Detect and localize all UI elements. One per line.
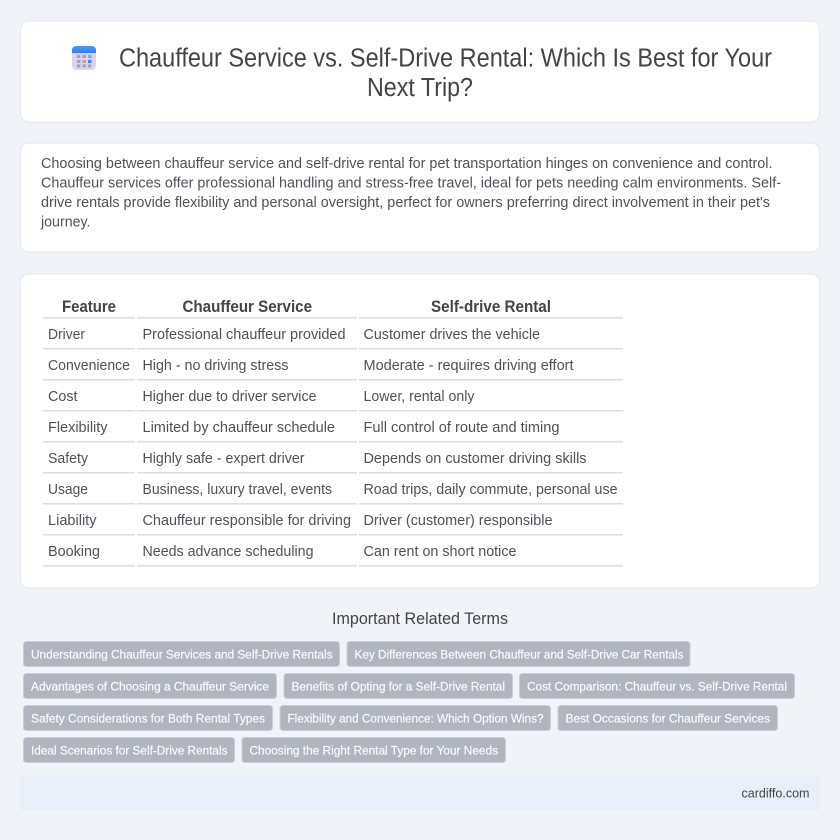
- text block: introduction paragraph: Choosing between chauffeur service and self-drive rental for pet transportation hinges on convenience and control.: [41, 156, 772, 172]
- row: safety: Depends on customer driving skills: [364, 451, 586, 467]
- row: usage: Usage: [48, 482, 88, 498]
- tag: Benefits of Opting for a Self-Drive Rental: [292, 679, 505, 693]
- row: convenience: High - no driving stress: [142, 358, 288, 374]
- row: usage: [48, 482, 618, 498]
- row: flexibility: [48, 420, 560, 436]
- tag: [24, 642, 340, 666]
- tag: [24, 738, 234, 762]
- title: [119, 44, 772, 102]
- tag: Ideal Scenarios for Self-Drive Rentals: [31, 743, 228, 757]
- row: liability: [48, 513, 552, 529]
- tag: Flexibility and Convenience: Which Option Wins?: [288, 711, 544, 725]
- row: liability: Chauffeur responsible for driving: [142, 513, 351, 529]
- tag: Best Occasions for Chauffeur Services: [566, 711, 770, 725]
- row: cost: Higher due to driver service: [142, 389, 316, 405]
- text block: introduction paragraph: journey.: [40, 214, 90, 230]
- row: usage: Road trips, daily commute, personal use: [364, 482, 618, 498]
- row: driver: Customer drives the vehicle: [364, 327, 540, 343]
- row: liability: Driver (customer) responsible: [364, 513, 552, 529]
- row: cost: [48, 389, 475, 405]
- text block: introduction paragraph: drive rentals provide flexibility and personal oversight, perfect for owners preferring direct involvement in their pet's: [41, 195, 770, 211]
- row: safety: Safety: [48, 451, 89, 467]
- row: flexibility: Flexibility: [48, 420, 108, 436]
- row: driver: [48, 327, 540, 343]
- tag: [284, 674, 512, 698]
- table header: [62, 298, 551, 316]
- tag: Choosing the Right Rental Type for Your Needs: [250, 743, 498, 757]
- tag: [280, 706, 550, 730]
- panel: title card: [20, 21, 820, 122]
- row: booking: [48, 544, 516, 560]
- table header: Chauffeur Service: [182, 298, 312, 316]
- row: convenience: Moderate - requires driving effort: [364, 358, 574, 374]
- footer: [20, 776, 820, 810]
- icon: calendar: [72, 46, 96, 70]
- row: booking: Needs advance scheduling: [142, 544, 314, 560]
- panel: comparison table: [20, 274, 820, 588]
- tag: [24, 674, 276, 698]
- tag: [242, 738, 506, 762]
- row: flexibility: Full control of route and timing: [364, 420, 560, 436]
- text block: introduction paragraph: Chauffeur services offer professional handling and stress-free travel, ideal for pets needing calm environments. Self-: [41, 176, 781, 192]
- row: safety: [48, 451, 586, 467]
- text block: introduction paragraph: [40, 156, 781, 230]
- table header: Self-drive Rental: [431, 298, 551, 316]
- tag: Advantages of Choosing a Chauffeur Service: [31, 679, 269, 693]
- row: convenience: Convenience: [48, 358, 130, 374]
- tag: [347, 642, 690, 666]
- row: flexibility: Limited by chauffeur schedule: [142, 420, 335, 436]
- tag: [558, 706, 778, 730]
- footer: cardiffo.com: [742, 785, 810, 800]
- tag: Cost Comparison: Chauffeur vs. Self-Drive Rental: [527, 679, 787, 693]
- row: driver: Professional chauffeur provided: [142, 327, 346, 343]
- title: Chauffeur Service vs. Self-Drive Rental: Which Is Best for Your: [119, 44, 772, 72]
- title: Next Trip?: [367, 74, 473, 102]
- tag: Key Differences Between Chauffeur and Self-Drive Car Rentals: [354, 647, 684, 661]
- row: booking: Can rent on short notice: [364, 544, 516, 560]
- tag: Safety Considerations for Both Rental Types: [31, 711, 265, 725]
- tag: [24, 706, 272, 730]
- panel: related term tags: [24, 642, 794, 762]
- row: cost: Lower, rental only: [364, 389, 475, 405]
- table header: Feature: [62, 298, 116, 316]
- heading: important related terms: Important Related Terms: [332, 610, 508, 628]
- row: usage: Business, luxury travel, events: [142, 482, 332, 498]
- row: driver: Driver: [48, 327, 85, 343]
- panel: introduction: [20, 143, 820, 252]
- row: safety: Highly safe - expert driver: [142, 451, 305, 467]
- tag: Understanding Chauffeur Services and Self-Drive Rentals: [31, 647, 332, 661]
- row: cost: Cost: [48, 389, 78, 405]
- tag: [520, 674, 794, 698]
- row: booking: Booking: [48, 544, 100, 560]
- row: convenience: [48, 358, 574, 374]
- row: liability: Liability: [48, 513, 97, 529]
